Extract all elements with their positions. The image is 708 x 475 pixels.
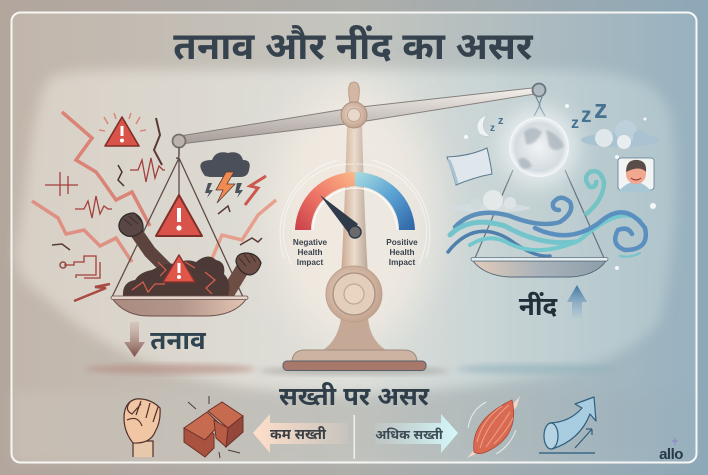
positive label: Positive: [386, 238, 418, 247]
subheading: सख्ती पर असर: [279, 382, 430, 411]
moon: [499, 107, 579, 187]
negative label: Negative: [293, 238, 328, 247]
base foot: [323, 318, 386, 350]
wind waves: [448, 198, 646, 257]
zzz: z: [571, 115, 579, 132]
needle hub: [349, 226, 361, 238]
icon: muscle: [467, 396, 520, 458]
zzz: z: [594, 94, 608, 124]
pulse lines: [45, 158, 165, 278]
warning icon top: [105, 117, 139, 146]
right arrow: more stiffness: अधिक सख्ती: [375, 427, 444, 442]
crescent and small zs: z: [498, 115, 504, 127]
cloud top right: [581, 120, 659, 149]
gauge glow rings: [280, 160, 430, 265]
crescent and small zs: [477, 115, 504, 136]
gauge inner highlight: [313, 188, 397, 230]
gauge: [280, 160, 430, 267]
teal swirl: [585, 171, 604, 215]
storm cloud: [200, 152, 250, 203]
left scale: stress: [32, 112, 276, 357]
needle: [320, 195, 358, 235]
left arrow: less stiffness: कम सख्ती: [270, 426, 327, 442]
rubble cracks: [132, 262, 215, 294]
icon: fist: [124, 399, 160, 457]
balance scale stand: [180, 82, 541, 370]
stand glow: [337, 90, 371, 340]
cloud left: [450, 190, 530, 212]
base knob: [326, 266, 382, 322]
logo: allo: [659, 446, 683, 463]
right scale: sleep: [447, 84, 659, 321]
gauge blue arc: [355, 172, 415, 230]
left arrow: less stiffness: [253, 414, 348, 453]
crescent and small zs: z: [490, 123, 495, 134]
left pan: [112, 298, 247, 316]
pillow: [447, 148, 492, 185]
raised fists: [119, 213, 261, 296]
column: [341, 126, 368, 275]
circuit node: [60, 262, 66, 268]
warning icon lower: [163, 255, 195, 282]
right pan: [473, 261, 606, 277]
bottom row: [124, 396, 596, 459]
top finial: [349, 82, 359, 102]
sparkles: [464, 104, 656, 270]
arrow down: [124, 322, 145, 357]
logo: [659, 438, 683, 463]
arrow up: [567, 285, 587, 318]
warning rays: [99, 113, 146, 131]
red lightning bolts: [32, 112, 276, 301]
sleeping boy icon: [618, 158, 654, 192]
negative label: Health: [297, 248, 323, 257]
beam hub: [341, 102, 367, 128]
scale beam: [180, 87, 541, 144]
label stress: तनाव: [150, 325, 207, 355]
scale ring and hook: [532, 84, 546, 96]
zzz: z: [581, 104, 592, 127]
right arrow: more stiffness: [375, 414, 458, 453]
scale chains: [112, 158, 243, 297]
scale strings: [475, 170, 604, 258]
title: तनाव और नींद का असर: [173, 24, 534, 68]
divider: [354, 415, 355, 459]
scale ring and hook: [172, 134, 186, 148]
zzz: [571, 94, 608, 132]
icon: stiff tube arrow: [539, 397, 596, 453]
positive label: Health: [389, 248, 415, 257]
gauge red arc: [295, 172, 355, 230]
negative label: Impact: [297, 258, 323, 267]
icon: cracked brick: [184, 396, 243, 458]
positive label: Impact: [389, 258, 415, 267]
dark rubble mass: [123, 256, 229, 296]
label sleep: नींद: [519, 291, 558, 321]
warning icon middle: [156, 195, 202, 236]
